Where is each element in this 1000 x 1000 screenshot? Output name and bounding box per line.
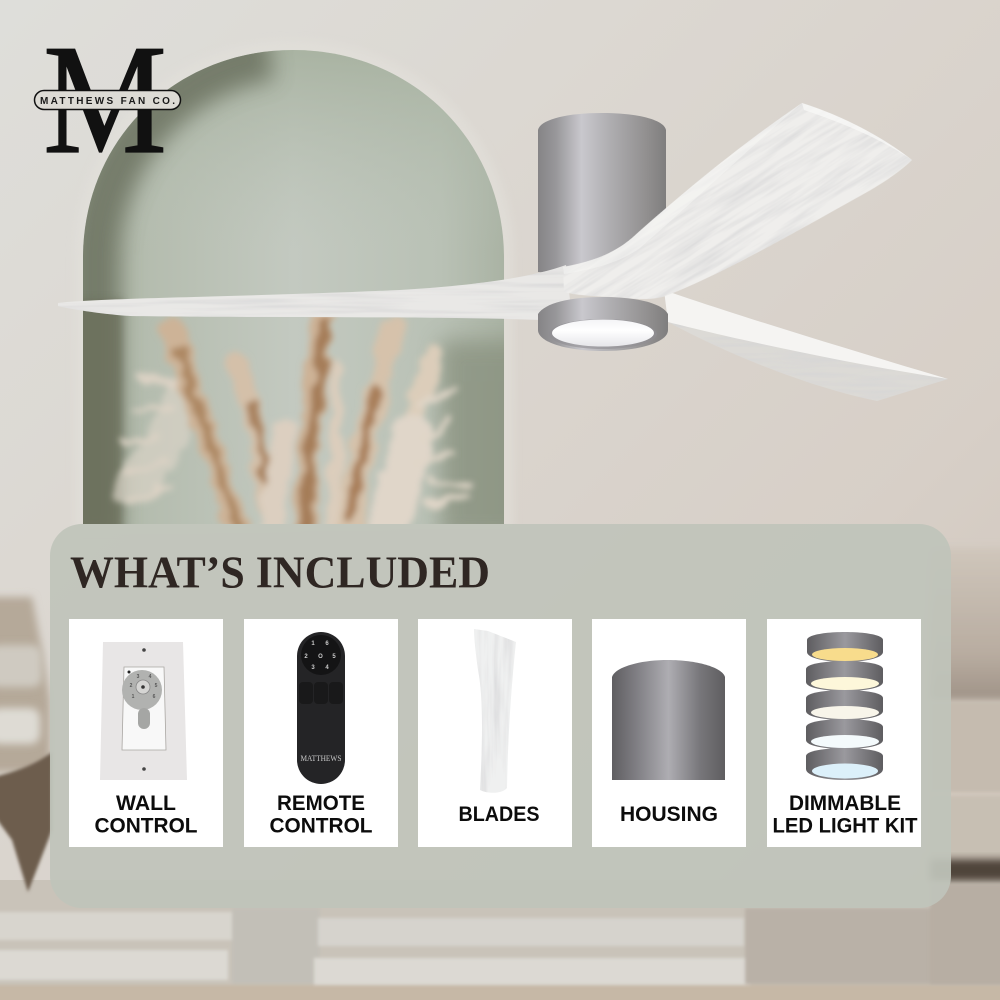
icon: remote: 5 <box>332 654 336 660</box>
label: REMOTE <box>277 792 365 815</box>
ceiling fan <box>58 0 1000 456</box>
card: dimmable LED light kit: LED LIGHT KIT <box>772 814 918 838</box>
sofa right <box>930 548 1000 984</box>
logo monogram: M <box>43 13 167 187</box>
icon: wall control: 6 <box>153 694 156 700</box>
card: wall control: CONTROL <box>94 814 198 838</box>
panel: what's included <box>50 524 951 908</box>
logo name pill <box>34 90 180 110</box>
icon: wall control: 2 <box>130 683 133 689</box>
icon: remote: O <box>318 654 323 660</box>
LED light <box>538 297 668 351</box>
icon: remote: 6 <box>325 641 329 647</box>
label: BLADES <box>458 803 540 826</box>
icon: wall control <box>100 642 187 780</box>
icon: remote: 3 <box>311 665 315 671</box>
upper right blade <box>475 0 1000 456</box>
icon: wall control: 3 <box>137 674 140 680</box>
card: dimmable LED light kit <box>767 619 921 847</box>
icon: blade <box>474 629 516 793</box>
heading: WHAT’S INCLUDED <box>70 548 490 598</box>
cushions and dark plant left <box>0 597 52 892</box>
icon: wall control: 1 <box>132 694 135 700</box>
fan housing <box>538 113 666 277</box>
icon: remote: 2 <box>304 654 308 660</box>
icon: wall control: 5 <box>155 683 158 689</box>
logo name pill: MATTHEWS FAN CO. <box>40 96 175 107</box>
left blade <box>58 265 570 320</box>
arched niche with pampas grass <box>83 50 504 524</box>
logo: Matthews Fan Co. <box>34 13 180 187</box>
card: remote control <box>244 619 398 847</box>
card: remote control: CONTROL <box>270 814 373 838</box>
card: blades <box>418 619 572 847</box>
card: wall control <box>69 619 223 847</box>
label: WALL <box>116 792 176 815</box>
floor <box>0 880 1000 1000</box>
pampas grass <box>122 318 468 530</box>
icon: wall control: 4 <box>149 674 152 680</box>
light reveal around niche <box>74 40 514 530</box>
label: HOUSING <box>620 803 718 826</box>
icon: remote: MATTHEWS <box>300 754 342 763</box>
icon: housing <box>612 660 725 780</box>
icon: remote: 1 <box>311 641 315 647</box>
icon: remote: 4 <box>325 665 329 671</box>
lower right blade <box>664 290 948 401</box>
card: housing <box>592 619 746 847</box>
icon: LED light stack <box>806 632 883 780</box>
label: DIMMABLE <box>789 792 901 815</box>
icon: remote <box>297 632 345 784</box>
